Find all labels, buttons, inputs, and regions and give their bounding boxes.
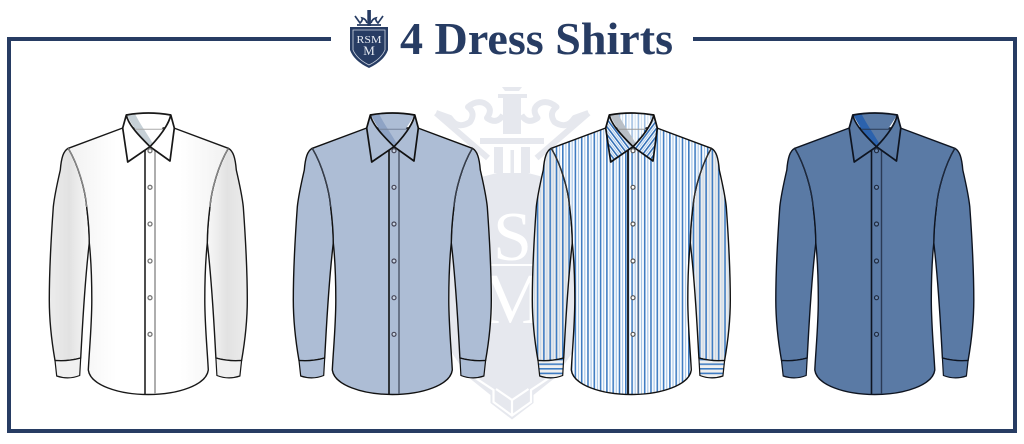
right sleeve	[690, 148, 730, 378]
logo monogram: M	[363, 43, 375, 58]
collar	[606, 113, 657, 162]
placket	[388, 148, 390, 394]
logo shield	[350, 27, 388, 68]
armhole seams	[68, 148, 228, 207]
right sleeve	[934, 148, 974, 378]
title: 4 Dress Shirts	[400, 13, 673, 64]
shirt: medium blue	[776, 113, 974, 394]
buttons	[392, 149, 396, 336]
collar	[367, 113, 418, 162]
collar	[849, 113, 901, 162]
right sleeve	[207, 148, 247, 378]
collar	[123, 113, 174, 162]
watermark chevron cut	[471, 375, 554, 416]
left sleeve	[532, 148, 572, 378]
background watermark crest	[436, 87, 588, 420]
shirt: striped	[532, 113, 730, 394]
body	[795, 128, 955, 394]
buttons	[874, 149, 878, 336]
armhole seams	[795, 148, 955, 207]
logo crest	[350, 10, 388, 68]
left sleeve	[776, 148, 816, 378]
body	[68, 128, 228, 394]
body	[551, 128, 711, 394]
buttons	[631, 149, 635, 336]
watermark crown	[436, 102, 588, 158]
placket	[870, 148, 872, 394]
left sleeve	[293, 148, 333, 378]
logo crown and sword	[355, 16, 383, 25]
armhole seams	[551, 148, 711, 207]
logo monogram	[356, 35, 382, 58]
watermark shield	[450, 173, 574, 420]
left sleeve	[49, 148, 89, 378]
right sleeve	[451, 148, 491, 378]
watermark monogram: S	[493, 199, 532, 276]
armhole seams	[312, 148, 472, 207]
placket	[627, 148, 629, 394]
shirt: white	[49, 113, 247, 394]
watermark monogram	[470, 199, 554, 339]
watermark monogram: M	[480, 259, 545, 339]
buttons	[148, 149, 152, 336]
placket	[144, 148, 146, 394]
shirt: light blue	[293, 113, 491, 394]
body	[312, 128, 472, 394]
watermark sword	[480, 87, 544, 173]
logo monogram: RSM	[356, 35, 382, 46]
